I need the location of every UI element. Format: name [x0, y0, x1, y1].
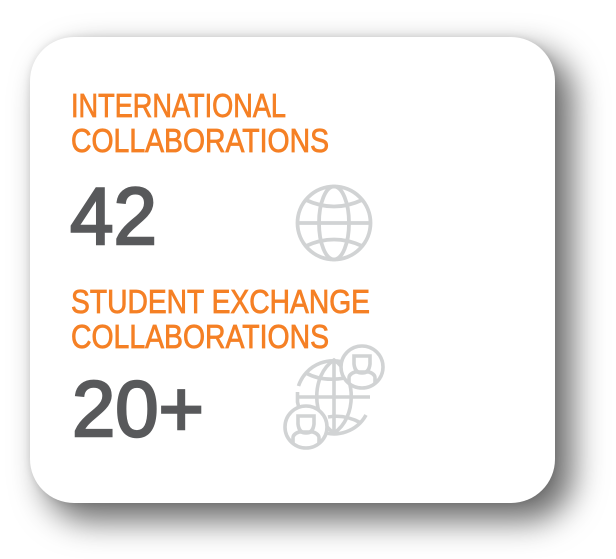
panel: white rounded card with shadow: [30, 37, 555, 503]
heading: student exchange collaborations: STUDENT EXCHANGE: [71, 283, 370, 320]
heading: student exchange collaborations: COLLABORATIONS: [71, 318, 329, 355]
number: 20+: 20+: [72, 364, 204, 453]
heading: international collaborations: INTERNATIONAL: [71, 87, 286, 124]
icon: globe: [298, 186, 370, 260]
number: 42: 42: [70, 172, 157, 262]
heading: student exchange collaborations: [71, 283, 370, 355]
heading: international collaborations: [71, 87, 329, 159]
icon: globe with two people: [285, 346, 383, 448]
heading: international collaborations: COLLABORATIONS: [71, 122, 329, 159]
